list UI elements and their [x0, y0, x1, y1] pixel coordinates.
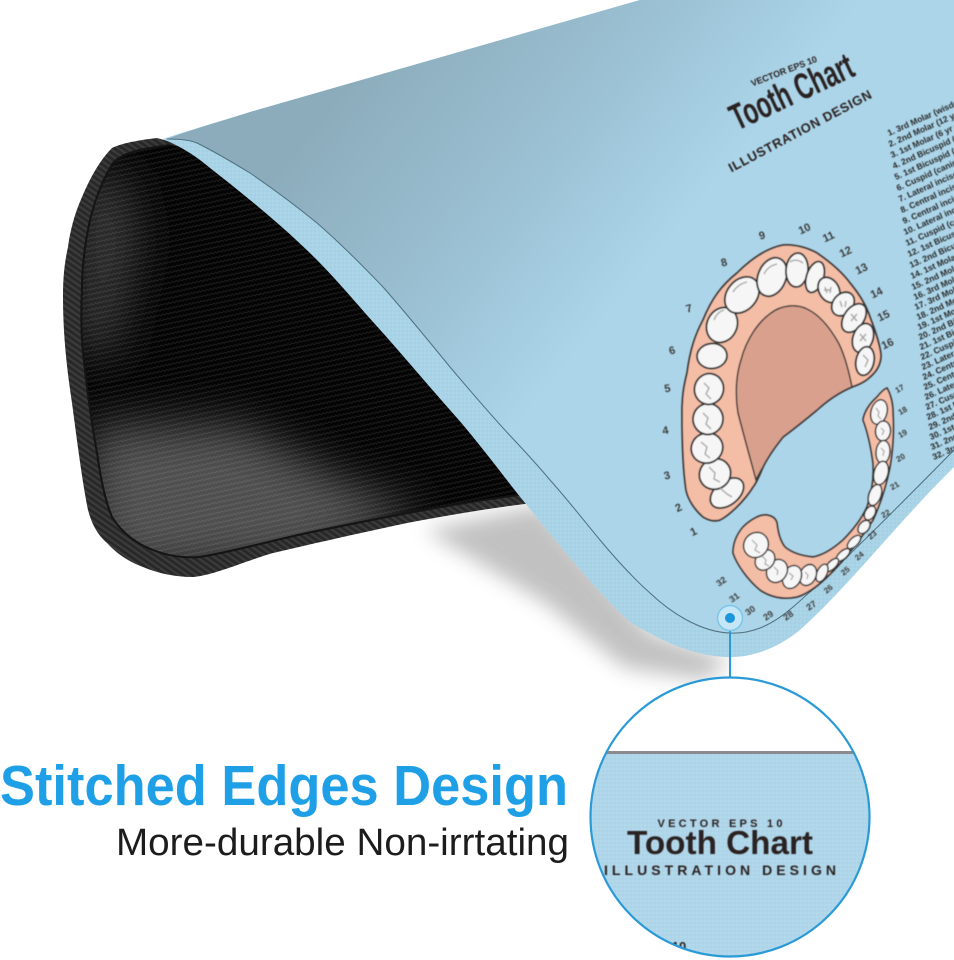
tooth numbers: [661, 221, 909, 623]
tooth numbers: 26: [822, 582, 835, 595]
hem band: [163, 0, 954, 657]
tooth numbers: 10: [797, 221, 813, 237]
tooth numbers: 7: [685, 303, 694, 316]
tooth numbers: 4: [661, 424, 670, 437]
lower molar creases: [752, 408, 884, 580]
tooth numbers: 22: [880, 507, 892, 520]
tooth numbers: 31: [727, 591, 741, 605]
chart title: ILLUSTRATION DESIGN: [726, 87, 874, 175]
tooth numbers: 21: [889, 479, 901, 492]
lower gum: [733, 388, 893, 598]
tooth name list: [886, 83, 954, 462]
tooth numbers: 8: [720, 257, 729, 270]
tooth numbers: 1: [688, 526, 699, 539]
tooth chart artwork: [661, 45, 954, 623]
callout marker dot: [718, 606, 742, 630]
tooth numbers: 23: [866, 528, 879, 541]
lower teeth: [738, 398, 891, 592]
upper gum and palate: [682, 245, 881, 521]
tooth numbers: 28: [781, 609, 795, 623]
magnified title: [604, 818, 836, 954]
tooth numbers: 25: [839, 564, 852, 577]
magnified title: 10: [672, 939, 686, 954]
tooth numbers: 13: [854, 261, 870, 277]
tooth numbers: 19: [897, 427, 909, 440]
magnified title: ILLUSTRATION DESIGN: [604, 862, 836, 878]
chart title: Tooth Chart: [723, 45, 860, 138]
callout connector line: [729, 630, 731, 678]
magnified detail circle: [590, 677, 870, 958]
tooth numbers: 6: [668, 345, 677, 358]
tooth numbers: 20: [895, 451, 907, 464]
tooth numbers: 14: [869, 285, 886, 301]
tooth numbers: 9: [758, 230, 767, 243]
pad underside (black rubber base): [63, 138, 526, 577]
tooth numbers: 3: [663, 470, 672, 483]
chart title: VECTOR EPS 10: [749, 54, 818, 88]
magnified title: Tooth Chart: [627, 824, 813, 861]
magnified title: VECTOR EPS 10: [658, 818, 782, 830]
tooth numbers: 2: [673, 502, 684, 515]
tooth numbers: 16: [880, 336, 896, 352]
seam line: [167, 139, 954, 633]
tooth numbers: 18: [897, 404, 909, 417]
printed surface: [167, 0, 954, 633]
tooth numbers: 29: [761, 609, 775, 623]
subheading: More-durable Non-irrtating: [116, 822, 569, 864]
pad top surface with stitched hem: [163, 0, 954, 657]
tooth numbers: 24: [853, 549, 866, 562]
palate: [736, 306, 852, 480]
tooth numbers: 30: [743, 604, 757, 618]
hem weave texture: [163, 0, 954, 657]
pad cast shadow: [425, 505, 730, 680]
heading: Stitched Edges Design: [0, 754, 568, 818]
tooth numbers: 17: [894, 382, 906, 395]
tooth numbers: 5: [663, 383, 672, 395]
tooth numbers: 15: [876, 308, 892, 324]
upper molar creases: [701, 260, 868, 497]
upper teeth: [686, 252, 878, 514]
tooth numbers: 12: [838, 244, 854, 260]
tooth numbers: 11: [821, 229, 837, 245]
tooth numbers: 32: [714, 575, 728, 589]
tooth numbers: 27: [804, 599, 818, 613]
